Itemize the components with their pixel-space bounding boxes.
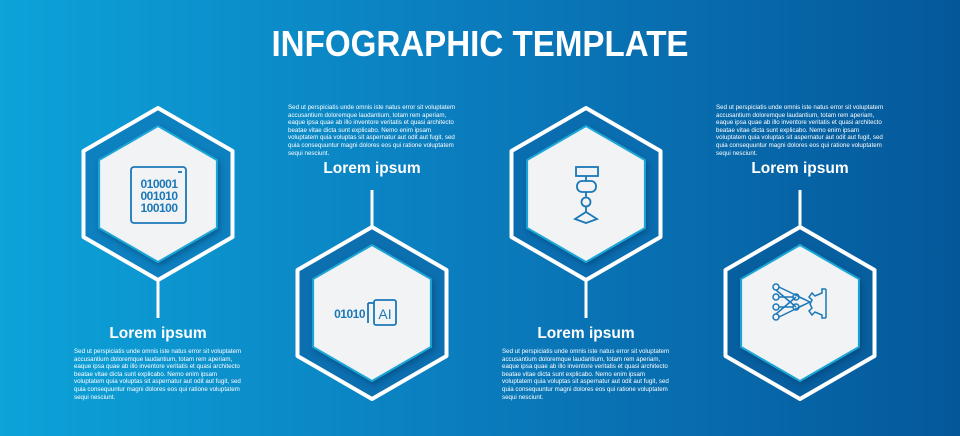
- icon: binary chip: 100100: [140, 201, 178, 215]
- panel 1 heading: Lorem ipsum: [109, 325, 207, 342]
- panel 4 hexagon: [726, 190, 874, 399]
- icon: binary chip: 001010: [140, 189, 178, 203]
- title: INFOGRAPHIC TEMPLATE: [271, 23, 689, 64]
- icon: AI binary: 01010: [334, 307, 366, 321]
- panel 4 text: Sed ut perspiciatis unde omnis iste natus error sit voluptatem accusantium doloremque laudantium, totam rem aperiam, eaque ipsa quae ab illo inventore veritatis et quasi architecto beatae vitae dicta sunt explicabo. Nemo enim ipsam voluptatem quia voluptas sit aspernatur aut odit aut fugit, sed quia consequuntur magni dolores eos qui ratione voluptatem sequi nesciunt.: [716, 104, 883, 157]
- panel 4 heading: Lorem ipsum: [751, 160, 849, 177]
- icon: binary chip: 010001: [140, 177, 178, 191]
- panel 3 text: Sed ut perspiciatis unde omnis iste natus error sit voluptatem accusantium doloremque laudantium, totam rem aperiam, eaque ipsa quae ab illo inventore veritatis et quasi architecto beatae vitae dicta sunt explicabo. Nemo enim ipsam voluptatem quia voluptas sit aspernatur aut odit aut fugit, sed quia consequuntur magni dolores eos qui ratione voluptatem sequi nesciunt.: [502, 348, 669, 401]
- panel 1 hexagon: [84, 108, 232, 318]
- icon: AI binary: AI: [378, 306, 392, 322]
- icon: binary chip: [131, 167, 186, 223]
- panel 1 text: Sed ut perspiciatis unde omnis iste natus error sit voluptatem accusantium doloremque laudantium, totam rem aperiam, eaque ipsa quae ab illo inventore veritatis et quasi architecto beatae vitae dicta sunt explicabo. Nemo enim ipsam voluptatem quia voluptas sit aspernatur aut odit aut fugit, sed quia consequuntur magni dolores eos qui ratione voluptatem sequi nesciunt.: [74, 348, 241, 401]
- panel 2 hexagon: [298, 190, 446, 399]
- icon: AI binary: [334, 300, 396, 325]
- icon: neural network gear: [773, 284, 826, 320]
- icon: flowchart: [575, 167, 598, 223]
- panel 3 heading: Lorem ipsum: [537, 325, 635, 342]
- panel 3 hexagon: [512, 108, 660, 318]
- panel 2 heading: Lorem ipsum: [323, 160, 421, 177]
- panel 2 text: Sed ut perspiciatis unde omnis iste natus error sit voluptatem accusantium doloremque laudantium, totam rem aperiam, eaque ipsa quae ab illo inventore veritatis et quasi architecto beatae vitae dicta sunt explicabo. Nemo enim ipsam voluptatem quia voluptas sit aspernatur aut odit aut fugit, sed quia consequuntur magni dolores eos qui ratione voluptatem sequi nesciunt.: [288, 104, 455, 157]
